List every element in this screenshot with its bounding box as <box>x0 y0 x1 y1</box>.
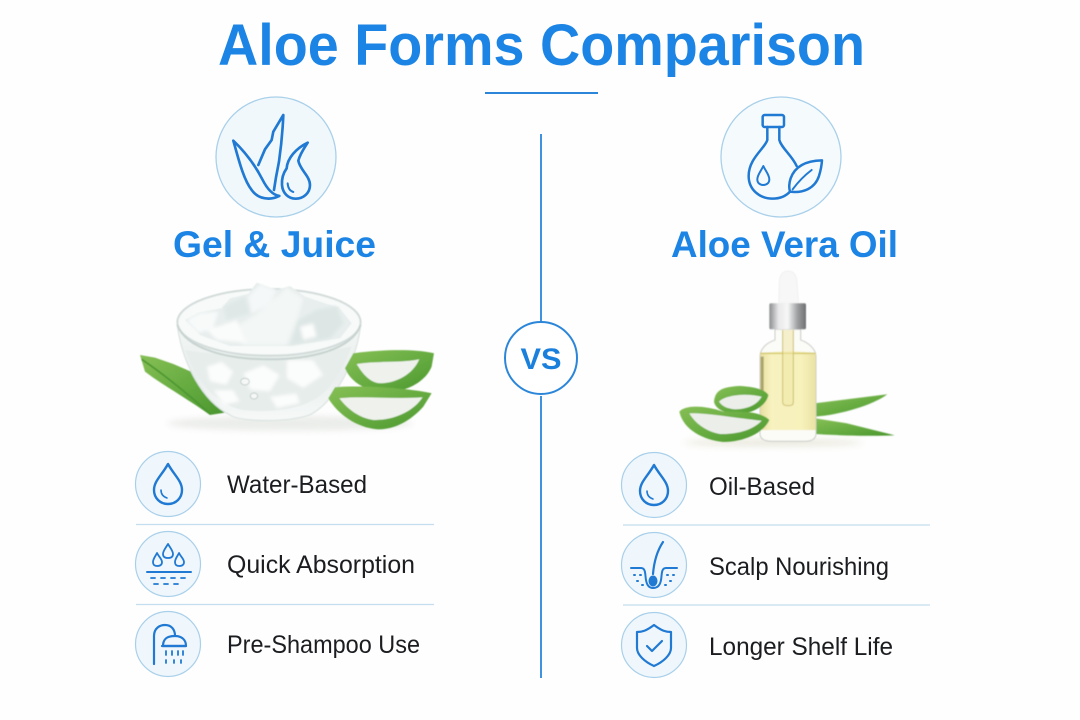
panel: aloe vera oil <box>622 97 930 678</box>
silver collar <box>769 303 806 329</box>
icon: aloe leaves and drop <box>216 97 336 217</box>
inner tube <box>783 330 793 406</box>
feature row: oil-based <box>622 452 815 518</box>
feature row: water-based: Water-Based <box>227 471 367 499</box>
aloe slice lower <box>679 407 769 442</box>
aloe slice upper <box>714 386 768 414</box>
feature row: longer shelf life <box>622 612 893 678</box>
aloe slice upper <box>345 350 434 392</box>
feature row: quick absorption: Quick Absorption <box>227 551 415 579</box>
feature row: scalp nourishing <box>622 532 889 598</box>
feature row: oil-based: Oil-Based <box>709 473 815 501</box>
panel: gel and juice <box>136 97 434 676</box>
image: bowl of aloe gel with leaves <box>140 283 434 431</box>
centre divider with VS badge <box>505 134 577 678</box>
gel chunks <box>185 283 352 346</box>
oil <box>760 351 816 430</box>
glass bottle <box>760 329 816 441</box>
bowl rim <box>177 289 361 356</box>
title underline <box>485 92 598 94</box>
aloe slice lower <box>328 387 432 429</box>
heading: gel and juice: Gel & Juice <box>173 224 376 265</box>
centre divider with VS badge: VS <box>520 343 562 376</box>
image: dropper bottle with aloe <box>679 271 895 447</box>
feature row: pre-shampoo use <box>136 612 420 676</box>
heading: aloe vera oil: Aloe Vera Oil <box>671 224 898 265</box>
dropper bulb <box>779 271 799 303</box>
feature row: water-based <box>136 452 367 516</box>
aloe blades <box>815 394 887 417</box>
bowl body <box>177 323 361 421</box>
feature row: scalp nourishing: Scalp Nourishing <box>709 553 889 581</box>
gel in bowl <box>185 347 352 411</box>
title: Aloe Forms Comparison <box>218 13 865 78</box>
icon: oil bottle and leaf <box>721 97 841 217</box>
feature row: quick absorption <box>136 532 415 596</box>
leaf blade <box>140 355 225 415</box>
feature row: pre-shampoo use: Pre-Shampoo Use <box>227 631 420 659</box>
feature row: longer shelf life: Longer Shelf Life <box>709 633 893 661</box>
